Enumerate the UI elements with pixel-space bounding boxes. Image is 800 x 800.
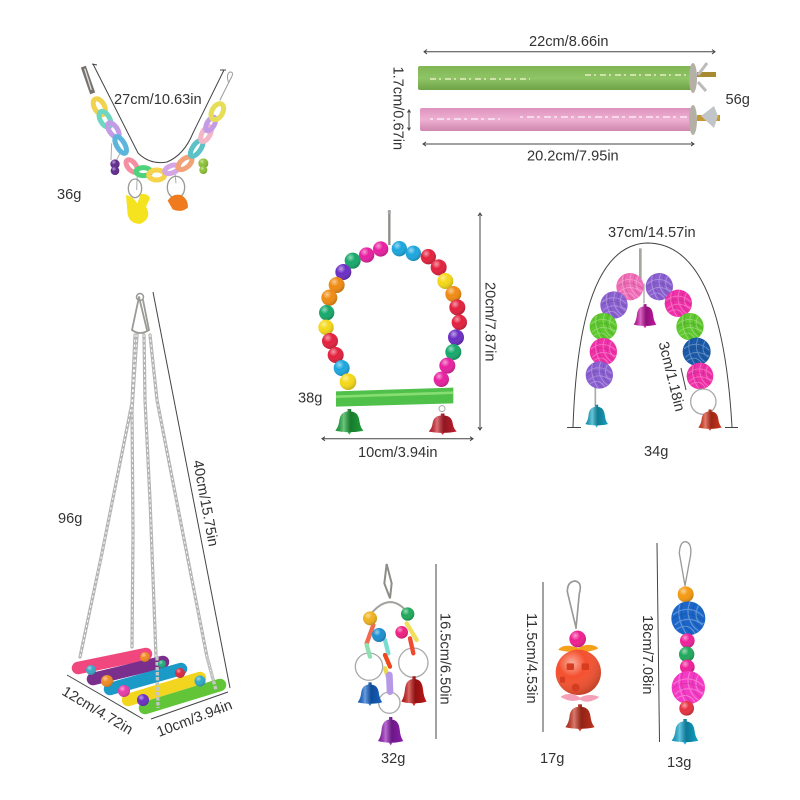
label: 1.7cm/0.67in: 1.7cm/0.67in xyxy=(390,66,406,150)
item: hanging ladder swing xyxy=(58,292,235,741)
dimension curve: 27cm xyxy=(92,64,226,163)
label: 96g: 96g xyxy=(58,511,82,527)
item: orange ball toy xyxy=(523,581,601,767)
label: 16.5cm/6.50in: 16.5cm/6.50in xyxy=(436,613,452,705)
dimension arrow: 3cm xyxy=(681,368,686,390)
label: 36g: 36g xyxy=(57,187,81,203)
dimension line: 12cm xyxy=(67,675,143,719)
label: 12cm/4.72in: 12cm/4.72in xyxy=(59,684,135,738)
dimension curve: 37cm xyxy=(567,243,738,428)
toy photo: hollow ball with bell xyxy=(556,581,601,731)
toy photo: wicker balls, beads and bell xyxy=(671,542,705,745)
label: 38g: 38g xyxy=(298,390,322,406)
label: 17g: 17g xyxy=(540,751,564,767)
label: 18cm/7.08in: 18cm/7.08in xyxy=(639,615,655,695)
label: 20.2cm/7.95in: 20.2cm/7.95in xyxy=(527,148,619,164)
item: beaded arch swing xyxy=(298,210,498,461)
label: 3cm/1.18in: 3cm/1.18in xyxy=(655,340,687,413)
dimension line: 40cm xyxy=(153,292,230,688)
dimension line: 11.5cm xyxy=(542,582,544,732)
label: 40cm/15.75in: 40cm/15.75in xyxy=(189,459,221,548)
toy photo: chains and coloured rungs xyxy=(78,294,220,708)
dimension line: 20cm xyxy=(478,213,482,430)
label: 32g: 32g xyxy=(381,751,405,767)
dimension line: 10cm xyxy=(322,437,473,441)
toy photo: beaded arch with perch and bells xyxy=(318,210,467,435)
item: wicker ball arch xyxy=(567,225,738,460)
label: 10cm/3.94in: 10cm/3.94in xyxy=(358,445,438,461)
label: 11.5cm/4.53in: 11.5cm/4.53in xyxy=(523,613,539,704)
label: 13g: 13g xyxy=(667,755,691,771)
label: 22cm/8.66in: 22cm/8.66in xyxy=(529,34,609,50)
dimension line: 22cm xyxy=(424,50,715,54)
label: 20cm/7.87in: 20cm/7.87in xyxy=(482,282,498,362)
label: 10cm/3.94in: 10cm/3.94in xyxy=(155,697,235,741)
dimension line: 10cm xyxy=(151,692,228,719)
dimension line: 20.2cm xyxy=(423,142,694,146)
item: bead chain toy xyxy=(57,64,232,224)
toy photo: rings, beads and three bells xyxy=(355,564,428,745)
label: 56g: 56g xyxy=(726,92,750,108)
label: 37cm/14.57in: 37cm/14.57in xyxy=(608,225,696,241)
toy photo: green and pink perches xyxy=(418,63,720,135)
dimension line: 16.5cm xyxy=(435,564,437,739)
dimension line: 18cm xyxy=(657,543,660,742)
dimension arrow: 1.7cm xyxy=(408,110,410,130)
item: sanded perches xyxy=(390,34,750,164)
label: 27cm/10.63in: 27cm/10.63in xyxy=(114,92,202,108)
label: 34g: 34g xyxy=(644,444,668,460)
item: wicker ball pendant xyxy=(639,542,705,771)
toy photo: wicker balls with bells xyxy=(585,248,722,431)
toy photo: acrylic chain with charms xyxy=(83,67,232,224)
item: ring and bell toy xyxy=(355,564,452,767)
